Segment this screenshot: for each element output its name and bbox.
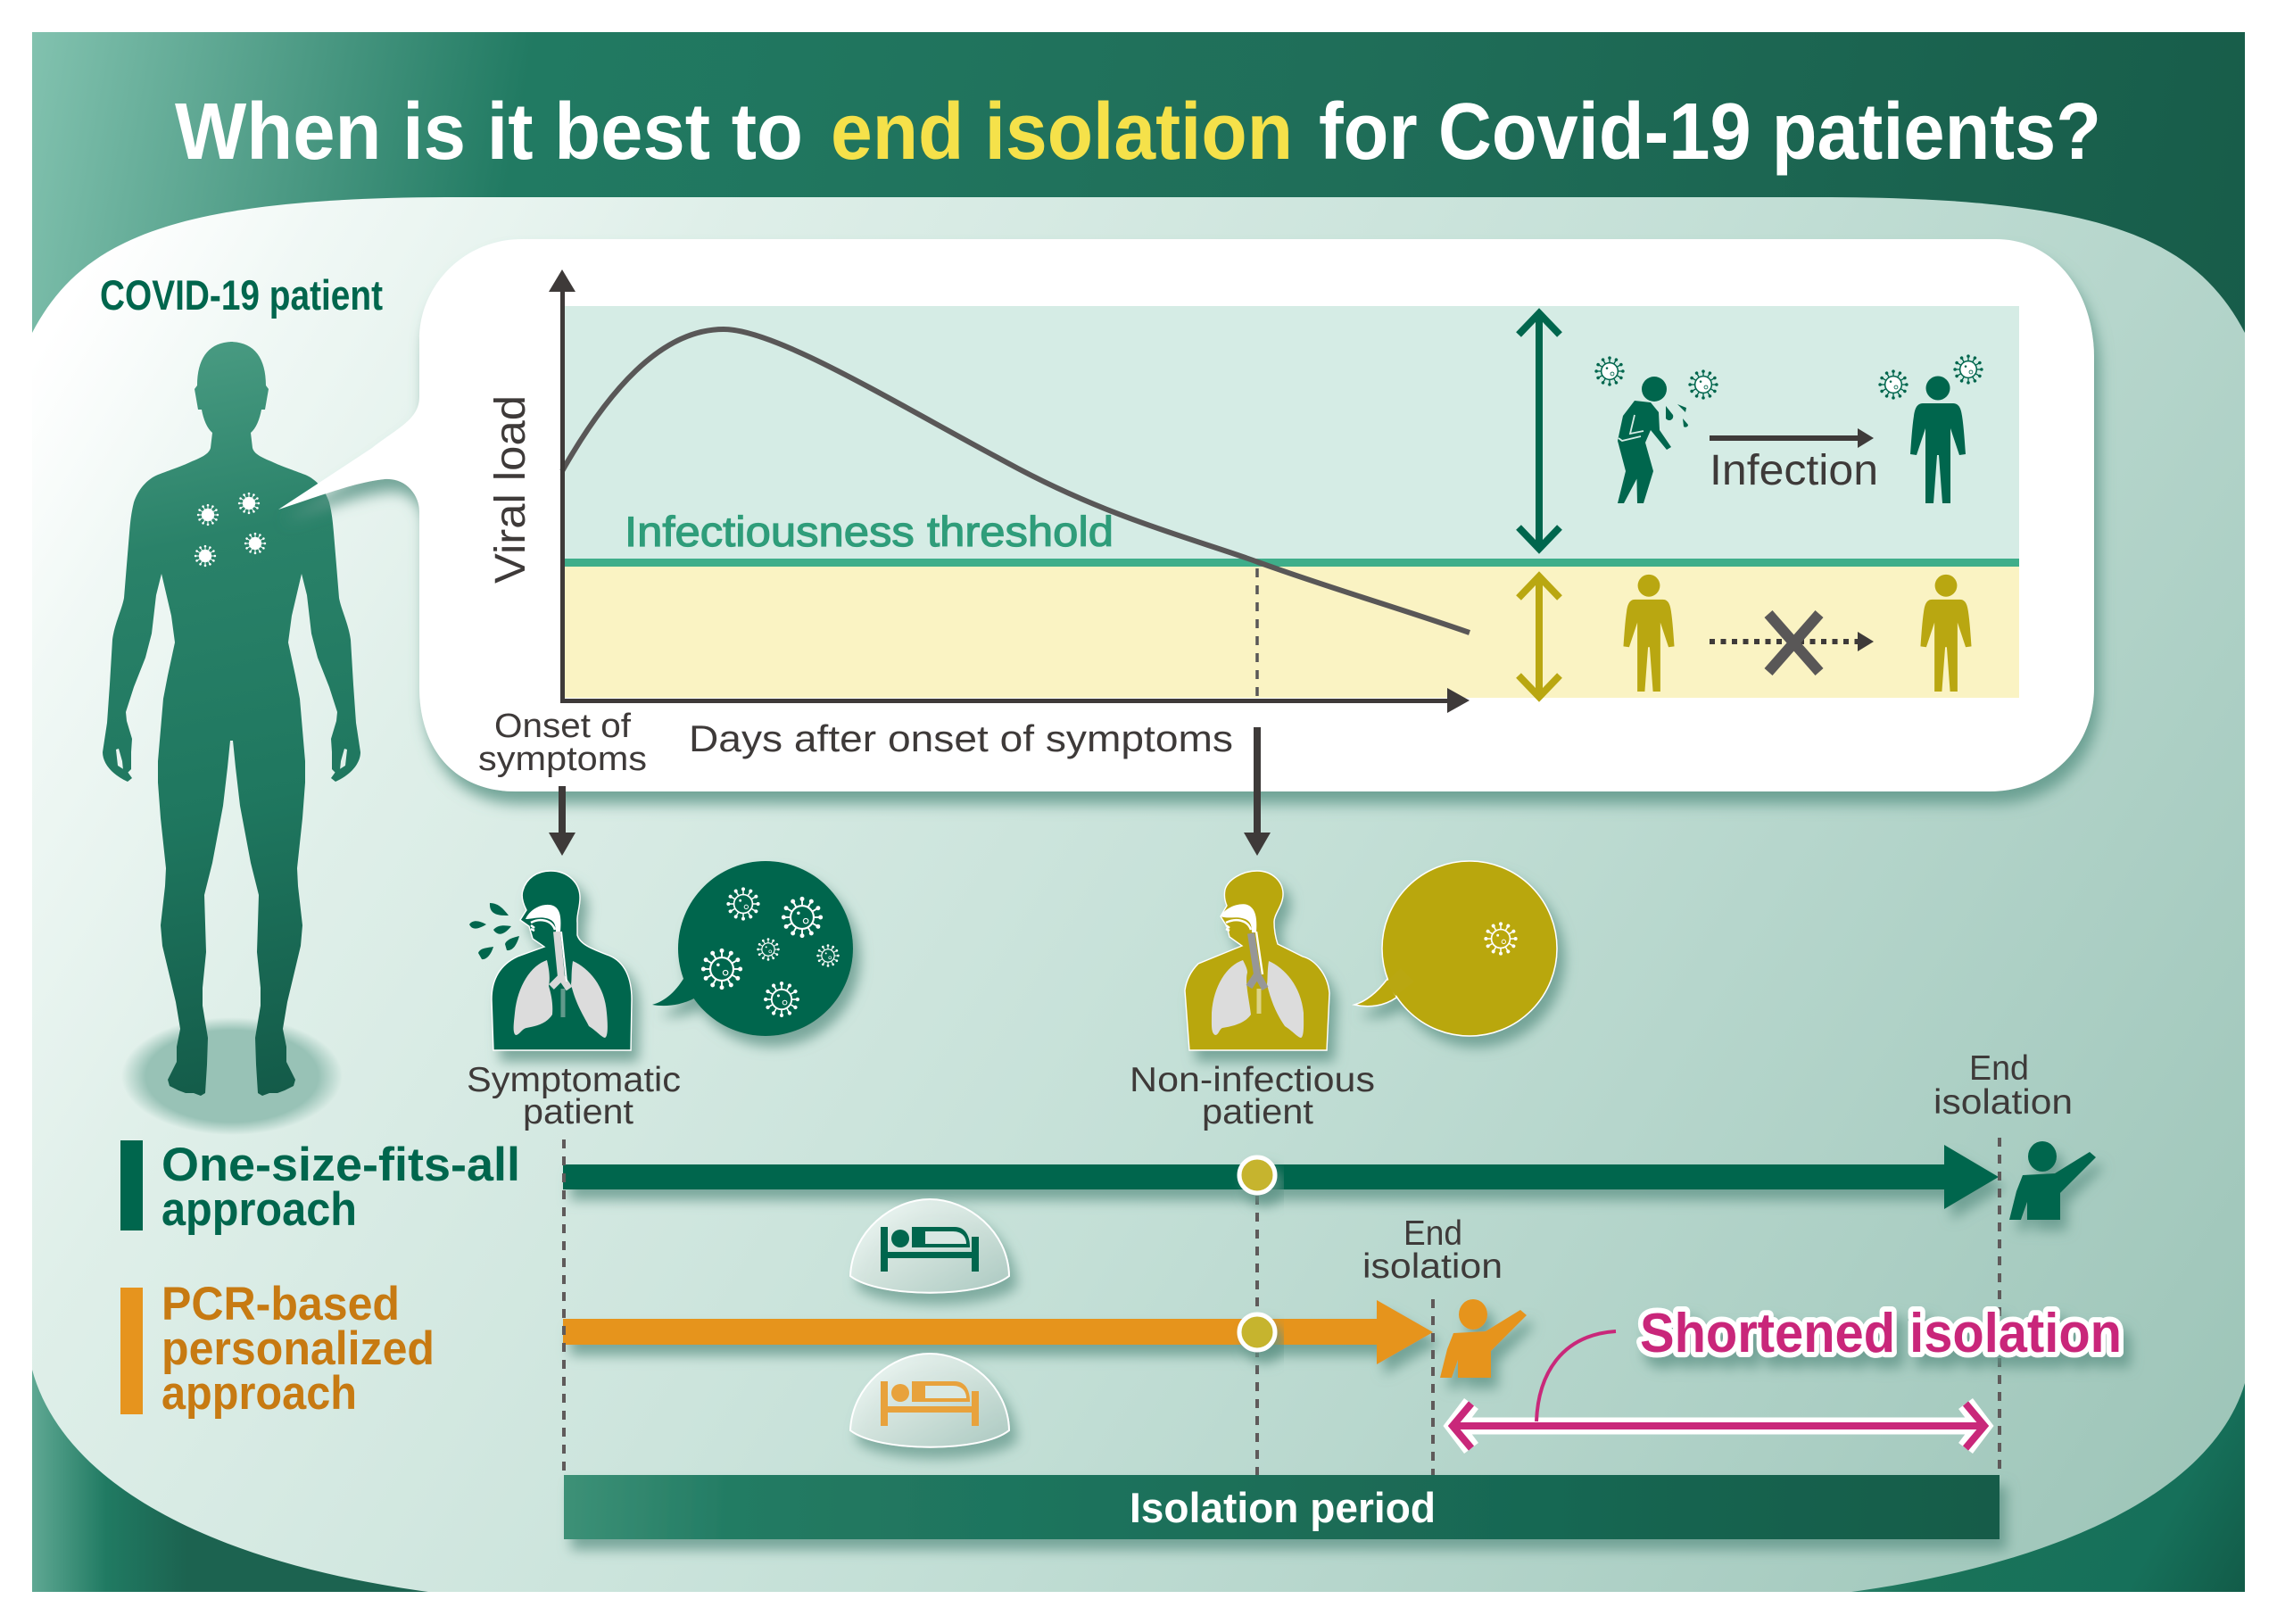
label: one-size-fits-all legend xyxy=(120,1139,520,1236)
label: PCR-based legend: approach xyxy=(161,1367,357,1420)
onset label: Onset of xyxy=(494,708,631,745)
arrow: onset to symptomatic xyxy=(549,786,575,856)
icon: waving person green xyxy=(2009,1141,2096,1220)
panel: white speech callout with chart xyxy=(278,239,2094,791)
icon: waving person orange xyxy=(1440,1299,1527,1378)
label: one-size-fits-all legend: One-size-fits-all xyxy=(161,1139,520,1191)
title: for Covid-19 patients? xyxy=(1319,87,2101,177)
arrow: PCR-based timeline xyxy=(563,1300,1433,1364)
connector: label to double arrow xyxy=(1536,1331,1616,1421)
label: end isolation right: isolation xyxy=(1933,1083,2073,1122)
range arrow: infectious xyxy=(1519,313,1560,549)
title xyxy=(175,87,2101,177)
arrow: threshold to non-infectious xyxy=(1244,727,1271,856)
x axis arrow xyxy=(560,688,1470,713)
icon: cross xyxy=(1768,614,1819,672)
icon: non-infectious patient with lungs xyxy=(1185,871,1329,1050)
label: PCR-based legend xyxy=(120,1278,435,1420)
panel: bottom-right corner shading xyxy=(1829,1338,2245,1592)
arrow: one-size-fits-all timeline xyxy=(563,1145,1999,1209)
label: symptomatic patient xyxy=(467,1061,681,1131)
label: one-size-fits-all legend: approach xyxy=(161,1183,357,1236)
title: end isolation xyxy=(831,87,1293,177)
onset label: symptoms xyxy=(478,741,647,778)
label: non-infectious patient: patient xyxy=(1202,1093,1313,1131)
label: PCR-based legend: PCR-based xyxy=(161,1278,400,1330)
label: non-infectious patient: Non-infectious xyxy=(1130,1061,1375,1099)
panel: bottom-left corner shading xyxy=(32,1338,443,1592)
y axis arrow xyxy=(549,269,575,703)
icon: floor shadow under body xyxy=(121,1017,343,1135)
callout: many viruses bubble xyxy=(652,861,853,1036)
label: end isolation middle: isolation xyxy=(1362,1247,1503,1286)
threshold label: Infectiousness threshold xyxy=(625,508,1114,555)
dashed drop line from curve xyxy=(1255,568,1259,698)
label: symptomatic patient: Symptomatic xyxy=(467,1061,681,1099)
marker: non-infectious on orange timeline xyxy=(1239,1314,1275,1350)
timeline dashed guides xyxy=(564,1138,2000,1476)
label: end isolation right: End xyxy=(1969,1049,2029,1088)
arrow: infection xyxy=(1710,428,1874,448)
icon: bed under dome orange xyxy=(850,1354,1009,1447)
arrow: dotted blocked transmission xyxy=(1710,632,1874,651)
x axis label: Days after onset of symptoms xyxy=(689,717,1233,759)
label: isolation period: Isolation period xyxy=(1130,1484,1436,1531)
label: end isolation middle: End xyxy=(1403,1214,1462,1253)
icon: infected person with viruses xyxy=(1878,354,1983,503)
icon: coughing person with viruses xyxy=(1594,356,1718,503)
label: non-infectious patient xyxy=(1130,1061,1375,1131)
marker: non-infectious on green timeline xyxy=(1239,1157,1275,1193)
label: PCR-based legend: personalized xyxy=(161,1322,435,1375)
onset label xyxy=(478,708,647,778)
arrow: shortened isolation double arrow xyxy=(1453,1404,1984,1448)
label: end isolation right xyxy=(1933,1049,2073,1122)
callout: shortened isolation: Shortened isolation xyxy=(1640,1303,2122,1364)
label: symptomatic patient: patient xyxy=(523,1093,633,1131)
viral load curve xyxy=(562,329,1470,633)
icon: non-infectious person left xyxy=(1623,575,1675,692)
panel: isolation period bar xyxy=(564,1475,2000,1539)
y axis label: Viral load xyxy=(487,395,534,584)
icon: bed under dome green xyxy=(850,1199,1009,1293)
icon: symptomatic patient with lungs xyxy=(469,871,632,1050)
title: When is it best to xyxy=(175,87,803,177)
chart zone: non-infectious xyxy=(564,567,2019,698)
chart zone: infectious xyxy=(564,306,2019,559)
icon: viruses in chest xyxy=(195,493,266,567)
label: Infection: Infection xyxy=(1710,447,1878,494)
threshold line xyxy=(562,559,2019,567)
heading: COVID-19 patient: COVID-19 patient xyxy=(100,271,383,319)
icon: human body silhouette xyxy=(103,342,360,1096)
callout: single virus bubble xyxy=(1354,861,1557,1036)
label: end isolation middle xyxy=(1362,1214,1503,1286)
icon: non-infectious person right xyxy=(1920,575,1972,692)
range arrow: non-infectious xyxy=(1519,576,1560,697)
chart: viral load over time xyxy=(478,269,2019,778)
